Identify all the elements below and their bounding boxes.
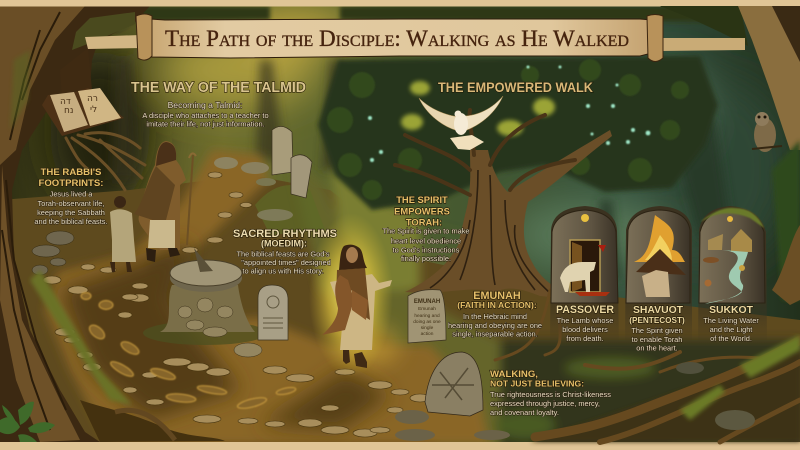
- text: becoming a talmid: Becoming a Talmid:: [168, 100, 242, 110]
- label: sukkot: and the Light: [710, 325, 752, 334]
- stone: Emunah: Emunah: [418, 306, 436, 312]
- central tree canopy: [318, 56, 718, 210]
- stone: Emunah: EMUNAH: [414, 299, 440, 305]
- section: the rabbi's footprints: and the biblical feasts.: [34, 217, 108, 226]
- section: sacred rhythms: SACRED RHYTHMS: [233, 228, 337, 240]
- right tree and owl: [660, 6, 800, 305]
- section: sacred rhythms: to align us with His story.: [242, 266, 324, 276]
- heading: THE WAY OF THE TALMID: [131, 80, 306, 96]
- roots below the book: [66, 133, 145, 190]
- text: becoming a talmid: A disciple who attaches to a teacher to: [142, 111, 269, 120]
- section: emunah: (FAITH IN ACTION):: [457, 300, 537, 310]
- section: the spirit empowers torah: heart level obedience: [391, 236, 461, 246]
- label: shavuot: [629, 305, 685, 352]
- section: the spirit empowers torah: finally possible.: [401, 254, 451, 263]
- section: the spirit empowers torah: THE SPIRIT: [396, 194, 448, 205]
- section: the rabbi's footprints: Jesus lived a: [50, 190, 93, 198]
- stone: Emunah: doing as one: [413, 319, 441, 325]
- scroll banner with title: [85, 14, 745, 62]
- icon: owl: [752, 112, 782, 152]
- label: shavuot: (PENTECOST): [629, 316, 685, 325]
- label: shavuot: The Spirit given: [631, 326, 683, 335]
- stone: Emunah: single: [421, 325, 434, 331]
- section: walking, not just believing: [490, 369, 611, 417]
- gravestone near sundial: [258, 285, 288, 340]
- section: the spirit empowers torah: [382, 194, 470, 263]
- section: sacred rhythms: The biblical feasts are God's: [236, 250, 330, 258]
- right scroll end: [647, 14, 663, 62]
- icon: open book with Hebrew letters: [42, 88, 124, 136]
- winding stone path: [32, 150, 490, 445]
- section: emunah: single, inseparable action.: [452, 330, 538, 338]
- icon: open book with Hebrew letters: נח: [64, 106, 73, 116]
- section: the rabbi's footprints: FOOTPRINTS:: [38, 178, 104, 189]
- icon: open book with Hebrew letters: לי: [90, 105, 97, 115]
- left tree with branches and roots: [0, 6, 225, 442]
- section: the empowered walk heading: THE EMPOWERED WALK: [438, 80, 593, 95]
- text: becoming a talmid: imitate their life, not just information.: [146, 120, 265, 128]
- title text: The Path of the Disciple: Walking as He Walked: [165, 26, 629, 51]
- section: sacred rhythms: "appointed times" designed: [241, 258, 331, 267]
- stone tablet: Passover: [550, 206, 619, 345]
- label: passover: [556, 304, 614, 343]
- label: sukkot: SUKKOT: [709, 305, 754, 316]
- section: sacred rhythms: [233, 228, 337, 276]
- label: passover: blood delivers: [562, 325, 608, 334]
- stone: Emunah: hearing and: [414, 313, 440, 319]
- stone: Emunah: action: [421, 331, 434, 337]
- section: the rabbi's footprints: Torah-observant life,: [38, 199, 104, 208]
- bottom parchment border: [0, 442, 800, 450]
- text: becoming a talmid: [142, 100, 269, 128]
- section: emunah: hearing and obeying are one: [448, 321, 542, 330]
- section: walking, not just believing: expressed through justice, mercy,: [490, 399, 600, 408]
- section: walking, not just believing: True righteousness is Christ-likeness: [490, 390, 611, 399]
- icon: flame, mountain and tablets: [634, 215, 686, 297]
- section: the rabbi's footprints: keeping the Sabbath: [37, 208, 105, 217]
- icon: white dove: [419, 96, 503, 150]
- section: walking, not just believing: NOT JUST BELIEVING:: [490, 378, 584, 388]
- figure: Jesus with halo: [309, 213, 393, 377]
- section: walking, not just believing: WALKING,: [490, 369, 538, 380]
- bottom-right roots: [495, 290, 800, 442]
- label: sukkot: of the World.: [710, 334, 752, 343]
- icon: open book with Hebrew letters: רה: [87, 94, 98, 104]
- stone tablet: Shavuot: [625, 206, 692, 345]
- section: the spirit empowers torah: EMPOWERS: [394, 206, 450, 216]
- label: sukkot: [703, 305, 759, 343]
- footprints trail: [81, 292, 296, 411]
- section: the spirit empowers torah: to God's instructions: [393, 246, 460, 254]
- stone tablet: Sukkot: [698, 206, 767, 345]
- figure: rabbi walking away with staff: [134, 141, 196, 262]
- central tree trunk and roots: [395, 110, 612, 300]
- distant stones on hill: [214, 126, 325, 235]
- label: sukkot: The Living Water: [703, 316, 759, 325]
- section: emunah: [448, 290, 542, 338]
- section: the way of the talmid: [131, 80, 306, 128]
- label: passover: from death.: [566, 334, 604, 343]
- label: shavuot: SHAVUOT: [633, 305, 684, 316]
- label: shavuot: on the heart.: [636, 344, 678, 352]
- icon: doorway and lamb: [560, 214, 610, 296]
- sundial on stone pedestal: [143, 248, 267, 357]
- label: passover: The Lamb whose: [557, 316, 613, 325]
- icon: tents and river: [703, 216, 752, 304]
- ground and hillside: [0, 160, 800, 450]
- section: emunah: In the Hebraic mind: [463, 312, 527, 321]
- left scroll end: [136, 14, 152, 60]
- section: the spirit empowers torah: TORAH:: [406, 216, 442, 228]
- section: the rabbi's footprints: [34, 167, 108, 226]
- label: shavuot: to enable Torah: [632, 335, 682, 344]
- icon: foreground leaves: [0, 402, 55, 442]
- top parchment border: [0, 0, 800, 6]
- section: sacred rhythms: (MOEDIM):: [261, 238, 307, 248]
- section: walking, not just believing: and covenant loyalty.: [490, 408, 559, 417]
- stone: Emunah: [408, 290, 446, 343]
- section: the rabbi's footprints: THE RABBI'S: [41, 167, 102, 178]
- stone: carved rune: [425, 352, 483, 416]
- icon: open book with Hebrew letters: דה: [60, 97, 71, 107]
- figure: child: [110, 196, 136, 272]
- pedestal rocks under rune stone: [395, 410, 510, 441]
- top foliage strip: [130, 6, 740, 22]
- section: emunah: EMUNAH: [473, 290, 521, 302]
- section: the spirit empowers torah: The Spirit is given to make: [382, 226, 470, 236]
- label: passover: PASSOVER: [556, 304, 614, 316]
